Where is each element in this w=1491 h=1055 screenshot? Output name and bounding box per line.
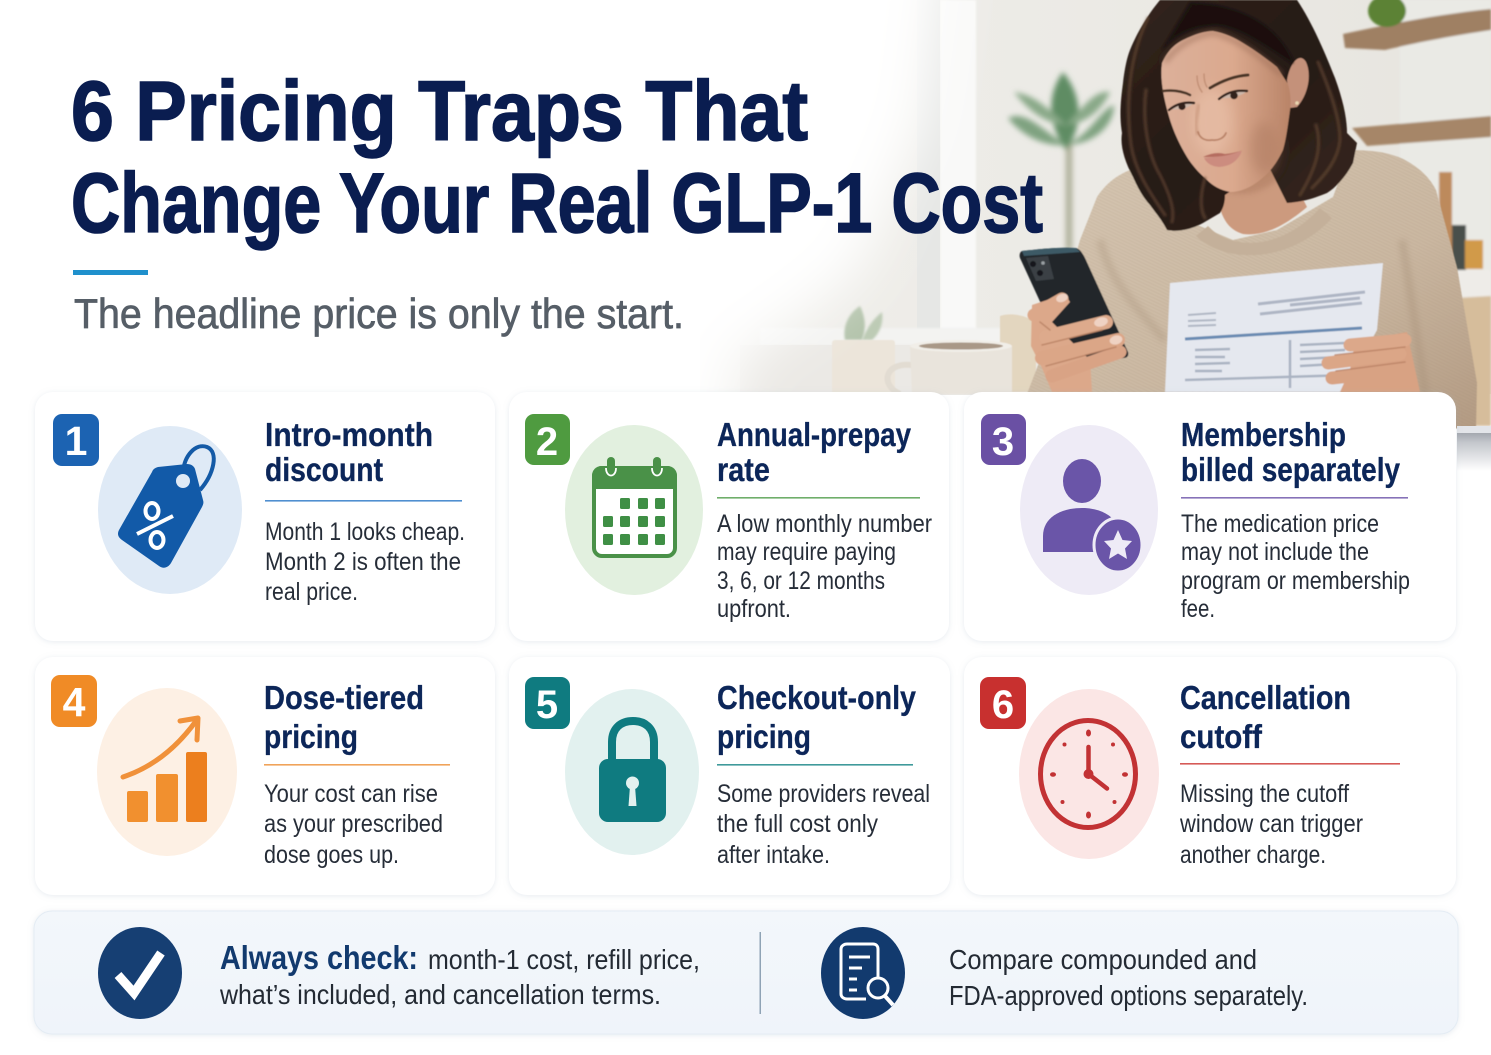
body: The medication price xyxy=(1181,510,1379,538)
body: A low monthly number xyxy=(717,510,932,538)
downcast eyes xyxy=(1170,104,1193,109)
billing paper xyxy=(1165,263,1383,392)
potted plant behind xyxy=(1008,72,1114,250)
divider xyxy=(717,497,920,499)
body: Some providers reveal xyxy=(717,780,930,808)
always check text: month-1 cost, refill price, xyxy=(428,944,700,975)
body xyxy=(717,510,932,623)
panel 3: membership billed separately xyxy=(964,392,1456,641)
body: real price. xyxy=(265,578,358,606)
bottom callout band xyxy=(34,911,1458,1034)
body: Missing the cutoff xyxy=(1180,780,1349,808)
heading: Intro-month xyxy=(265,416,433,453)
divider xyxy=(264,764,450,766)
heading: Membership xyxy=(1181,416,1346,453)
badge 4: 4 xyxy=(63,679,86,725)
subtitle: The headline price is only the start. xyxy=(74,290,684,337)
table edge fading to white xyxy=(1457,426,1491,471)
heading xyxy=(717,416,912,488)
heading: Dose-tiered xyxy=(264,679,424,716)
panel 6: cancellation cutoff xyxy=(964,657,1456,895)
badge 1: 1 xyxy=(65,418,87,464)
icon: check mark xyxy=(98,927,182,1019)
panel 5: checkout-only pricing xyxy=(509,657,950,895)
body: Month 1 looks cheap. xyxy=(265,518,465,546)
divider xyxy=(717,764,913,766)
phone xyxy=(1020,248,1128,362)
face xyxy=(1161,31,1291,192)
body: program or membership xyxy=(1181,567,1410,595)
icon: rising bar chart xyxy=(97,688,237,856)
compare options text: Compare compounded and xyxy=(949,944,1257,975)
kitchen shelves xyxy=(1343,0,1491,426)
heading: pricing xyxy=(717,718,811,755)
panel 2: annual-prepay rate xyxy=(509,392,949,641)
title: Change Your Real GLP-1 Cost xyxy=(71,156,1043,250)
neck xyxy=(1218,160,1307,234)
divider xyxy=(265,500,462,502)
body: may not include the xyxy=(1181,538,1369,566)
heading: rate xyxy=(717,451,770,488)
body: may require paying xyxy=(717,538,896,566)
sweater xyxy=(1027,150,1477,430)
body: upfront. xyxy=(717,595,791,623)
body: another charge. xyxy=(1180,841,1326,869)
heading xyxy=(264,679,424,755)
body xyxy=(265,518,465,606)
faded room scene xyxy=(700,0,1491,426)
icon: padlock xyxy=(565,689,699,855)
body xyxy=(1181,510,1410,623)
compare options text: FDA-approved options separately. xyxy=(949,980,1308,1011)
icon: calendar xyxy=(565,425,703,595)
body: dose goes up. xyxy=(264,841,399,869)
compare options text xyxy=(949,944,1308,1011)
badge 6: 6 xyxy=(992,683,1014,727)
eyebrows and frown lines xyxy=(1163,74,1248,95)
icon: document with magnifier xyxy=(821,927,905,1019)
nose xyxy=(1196,104,1199,135)
always check text: what’s included, and cancellation terms. xyxy=(219,979,661,1010)
badge 5: 5 xyxy=(536,683,558,727)
badge 2: 2 xyxy=(536,420,558,464)
icon: price tag with percent xyxy=(98,426,242,594)
left hand xyxy=(1031,292,1123,392)
heading: Cancellation xyxy=(1180,679,1351,716)
body: fee. xyxy=(1181,595,1215,623)
hair mass xyxy=(1120,0,1357,231)
badge 1 xyxy=(53,414,99,466)
badge 4 xyxy=(51,675,97,727)
body xyxy=(1179,780,1363,869)
heading: pricing xyxy=(264,718,358,755)
heading xyxy=(717,679,917,755)
body: Your cost can rise xyxy=(264,780,438,808)
heading xyxy=(1180,679,1351,755)
panel 4: dose-tiered pricing xyxy=(35,657,495,895)
heading xyxy=(265,416,433,488)
facial features xyxy=(1163,74,1248,167)
body: window can trigger xyxy=(1179,810,1363,838)
panel 1: intro-month discount xyxy=(35,392,495,641)
heading: Annual-prepay xyxy=(717,416,912,453)
accent bar xyxy=(73,270,148,275)
badge 3 xyxy=(981,414,1026,465)
collar xyxy=(1196,208,1332,255)
divider xyxy=(1180,763,1400,765)
small pot, coffee cup and cushion xyxy=(832,306,1036,394)
body: 3, 6, or 12 months xyxy=(717,567,885,595)
heading xyxy=(1181,416,1401,488)
background photo: woman reviewing bill and phone xyxy=(700,0,1491,471)
body: after intake. xyxy=(717,841,830,869)
body: the full cost only xyxy=(717,810,878,838)
icon: clock xyxy=(1019,689,1159,859)
body xyxy=(264,780,443,869)
ear xyxy=(1287,58,1309,108)
heading: Checkout-only xyxy=(717,679,917,716)
badge 3: 3 xyxy=(992,420,1014,464)
always check text xyxy=(219,939,700,1010)
divider xyxy=(1181,497,1408,499)
body: as your prescribed xyxy=(264,810,443,838)
body: Month 2 is often the xyxy=(265,548,461,576)
heading: billed separately xyxy=(1181,451,1401,488)
badge 5 xyxy=(525,677,570,729)
body xyxy=(717,780,930,869)
right hand xyxy=(1328,332,1420,392)
heading: cutoff xyxy=(1180,718,1263,755)
woman xyxy=(1020,0,1477,430)
always check text: Always check: xyxy=(220,939,418,976)
vertical separator xyxy=(760,932,761,1014)
heading: discount xyxy=(265,451,383,488)
title: 6 Pricing Traps That xyxy=(71,64,808,158)
pressed lips xyxy=(1204,151,1242,167)
icon: member with star xyxy=(1020,425,1158,595)
badge 2 xyxy=(525,414,570,465)
badge 6 xyxy=(980,677,1026,729)
hair highlights xyxy=(1129,18,1340,222)
title xyxy=(71,64,1043,250)
